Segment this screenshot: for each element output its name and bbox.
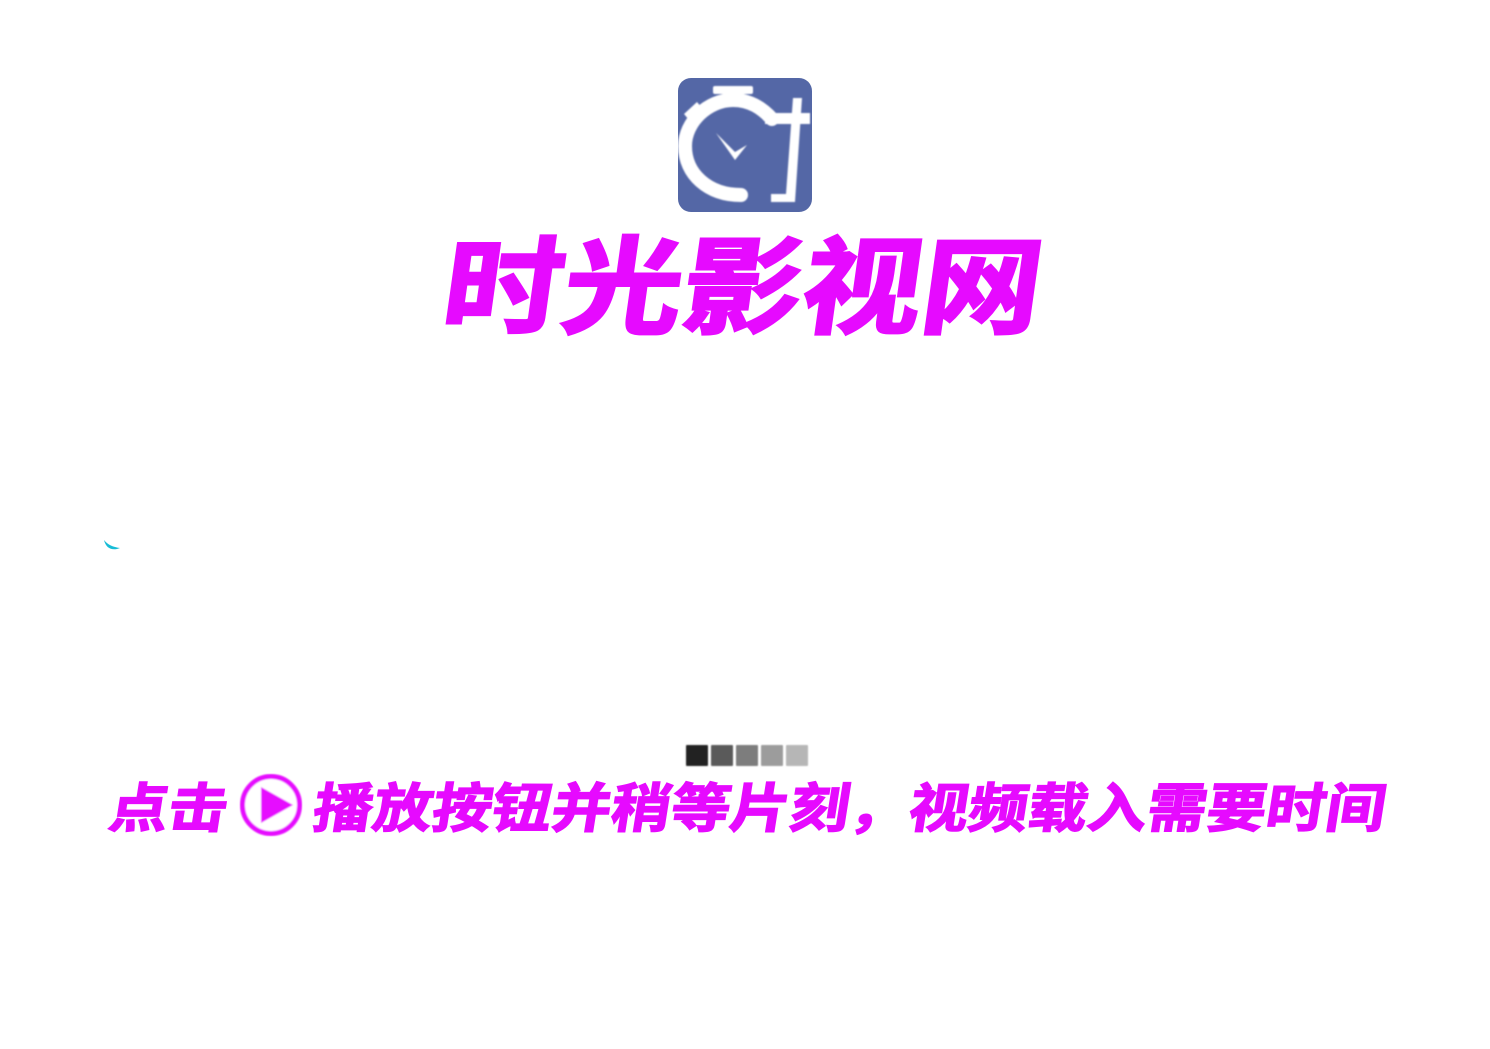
- instruction text: click: 点击: [105, 780, 232, 839]
- title: 时光影视网: [436, 229, 1050, 348]
- loading indicator squares: [686, 745, 808, 766]
- icon: play button: [242, 776, 300, 834]
- icon: stopwatch logo: [678, 78, 812, 212]
- decorative cyan mark: [104, 540, 120, 549]
- instruction text: press play and wait: 播放按钮并稍等片刻，视频载入需要时间: [309, 780, 1390, 839]
